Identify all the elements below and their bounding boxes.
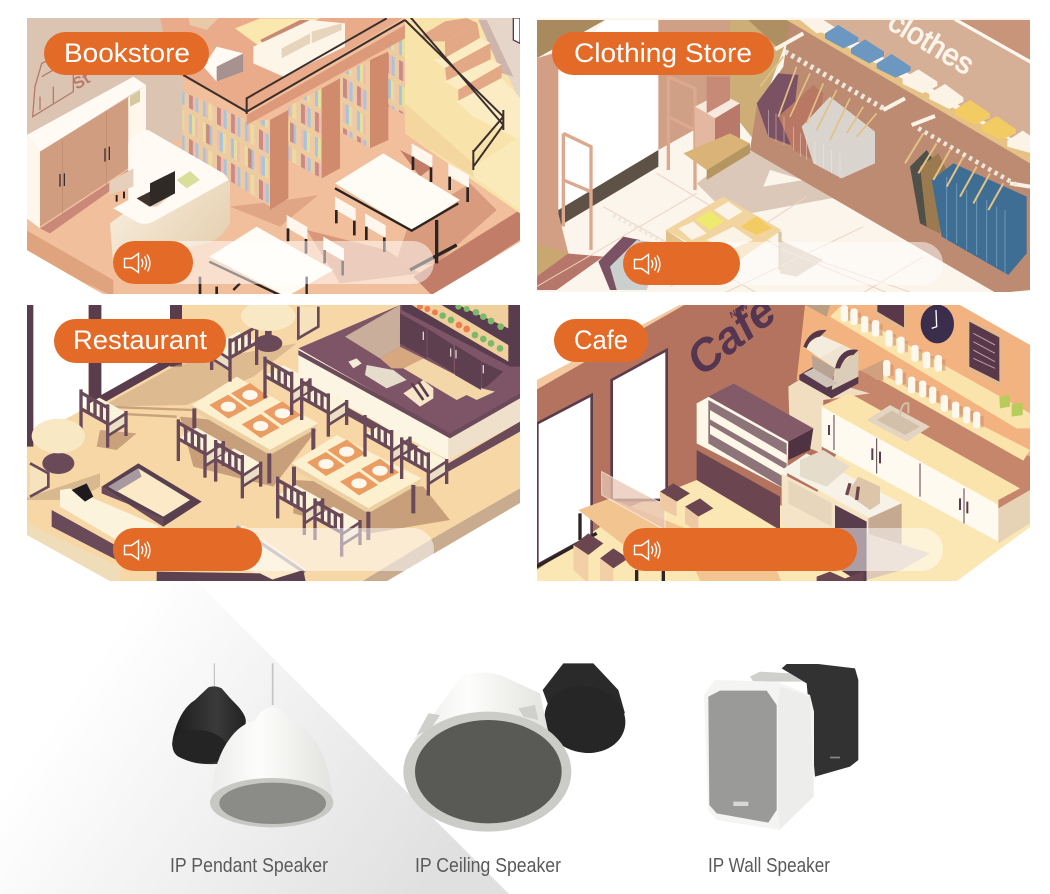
product: IP pendant speaker: [170, 663, 333, 877]
label: bookstore: [44, 32, 209, 75]
icon: espresso machine: [799, 330, 858, 398]
audio level bar: clothing store: [623, 242, 943, 285]
caption: IP Ceiling Speaker: IP Ceiling Speaker: [415, 855, 561, 877]
label: bookstore: Bookstore: [64, 38, 190, 68]
cafe scene illustration: [537, 305, 1030, 581]
icon: wall speakers: [704, 664, 858, 830]
panel: bookstore: [20, 10, 527, 300]
panel: restaurant: [20, 300, 527, 590]
label: clothing store: [552, 32, 774, 75]
label: cafe: Cafe: [574, 325, 628, 355]
caption: IP Pendant Speaker: IP Pendant Speaker: [170, 855, 328, 877]
icon: pendant speakers: [170, 663, 333, 827]
grey gradient background triangle: [0, 581, 509, 894]
restaurant scene illustration: [20, 300, 527, 590]
panel: clothing store: [530, 5, 1037, 300]
product: IP ceiling speaker: [403, 663, 632, 877]
audio level bar: restaurant: [113, 528, 434, 571]
panel: cafe: [537, 305, 1030, 581]
product: IP wall speaker: [704, 664, 858, 877]
clothing store scene illustration: clothes: [882, 5, 979, 81]
bookstore scene illustration: [20, 10, 527, 300]
bookstore scene illustration: St: [69, 68, 93, 93]
clothing store scene illustration: [530, 5, 1037, 300]
caption: IP Wall Speaker: IP Wall Speaker: [708, 855, 830, 877]
label: cafe: [554, 319, 648, 362]
cafe scene illustration: Cafe: [676, 284, 785, 385]
icon: ceiling speakers: [403, 663, 632, 832]
label: restaurant: Restaurant: [73, 325, 208, 355]
audio level bar: bookstore: [113, 241, 434, 284]
audio level bar: cafe: [623, 528, 943, 571]
label: clothing store: Clothing Store: [574, 38, 752, 68]
cafe scene illustration: NEW: [727, 300, 751, 320]
label: restaurant: [54, 319, 226, 363]
